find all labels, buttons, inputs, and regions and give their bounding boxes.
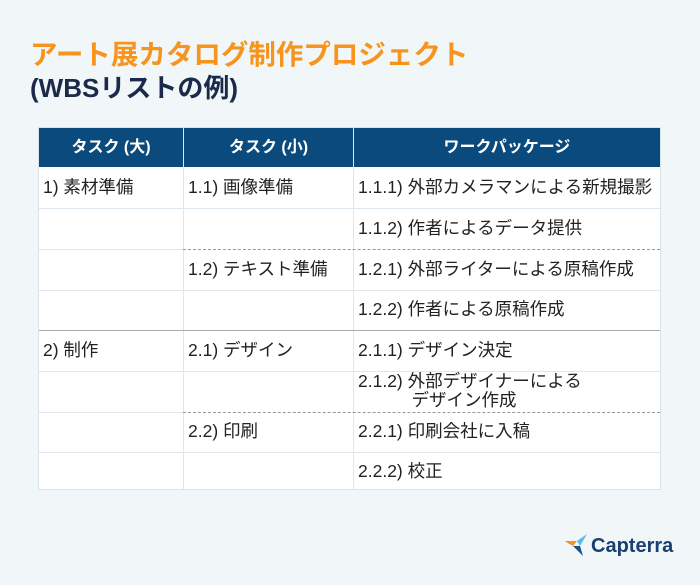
table xyxy=(38,127,661,490)
table: 2) 制作 xyxy=(43,340,98,360)
table: 2.2.1) 印刷会社に入稿 xyxy=(358,421,530,441)
header: task large xyxy=(39,128,183,167)
table: 2.1.1) デザイン決定 xyxy=(358,340,513,360)
table: 1.1.2) 作者によるデータ提供 xyxy=(358,218,582,238)
table: 1.1.1) 外部カメラマンによる新規撮影 xyxy=(358,177,652,197)
table: 2.2.2) 校正 xyxy=(358,461,443,481)
table: 2.2) 印刷 xyxy=(188,421,258,441)
row texts: 1) 素材準備 xyxy=(43,177,133,197)
header: task small xyxy=(184,128,353,167)
table: 2.1) デザイン xyxy=(188,340,293,360)
table: デザイン作成 xyxy=(411,390,516,410)
title: アート展カタログ制作プロジェクト xyxy=(30,39,468,70)
table: 1.2) テキスト準備 xyxy=(188,259,328,279)
header: task large: タスク (大) xyxy=(71,139,151,156)
header: work package: ワークパッケージ xyxy=(444,139,570,156)
table: 1.1) 画像準備 xyxy=(188,177,293,197)
table: 2.1.2) 外部デザイナーによる xyxy=(358,371,582,391)
table: 1.2.1) 外部ライターによる原稿作成 xyxy=(358,259,634,279)
subtitle: (WBSリストの例) xyxy=(30,73,238,103)
icon: capterra arrow xyxy=(565,534,587,556)
header: work package xyxy=(354,128,660,167)
table: 1.2.2) 作者による原稿作成 xyxy=(358,299,565,319)
logo: Capterra: Capterra xyxy=(591,535,673,557)
header: task small: タスク (小) xyxy=(229,139,308,156)
